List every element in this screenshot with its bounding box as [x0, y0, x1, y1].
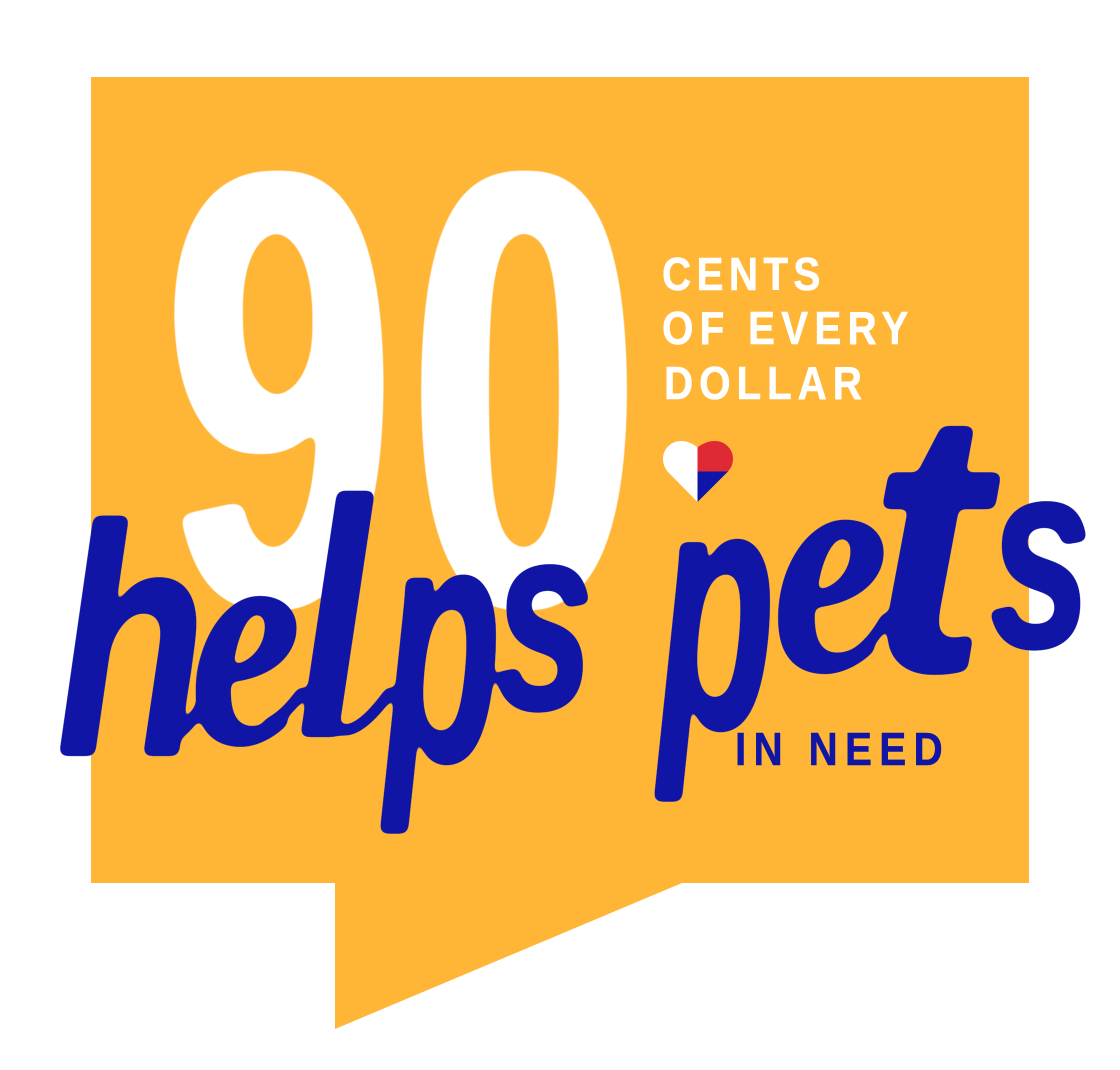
line: dollar: DOLLAR — [664, 359, 862, 410]
digit 9: 9 — [166, 39, 393, 742]
digit 0: 0 — [411, 39, 638, 742]
letter l: l — [297, 431, 374, 808]
letter s: s — [989, 403, 1092, 705]
letter p: p — [379, 450, 501, 836]
letter t: t — [868, 333, 1003, 750]
caption: cents of every dollar — [662, 250, 909, 410]
connecting swashes — [172, 692, 390, 737]
letter s: s — [494, 467, 594, 767]
line: cents: CENTS — [662, 250, 820, 301]
script word: pets — [653, 333, 1092, 805]
connecting swash — [848, 618, 886, 658]
script word: helps — [56, 431, 594, 836]
letter h: h — [56, 458, 206, 825]
letter p: p — [653, 411, 775, 805]
letter e: e — [773, 388, 888, 739]
speech bubble panel — [91, 77, 1029, 1029]
line: of every: OF EVERY — [662, 304, 909, 355]
big number 90 — [166, 39, 638, 742]
caption: in need: IN NEED — [735, 725, 943, 776]
icon: heart — [663, 441, 733, 502]
letter e: e — [191, 467, 301, 810]
